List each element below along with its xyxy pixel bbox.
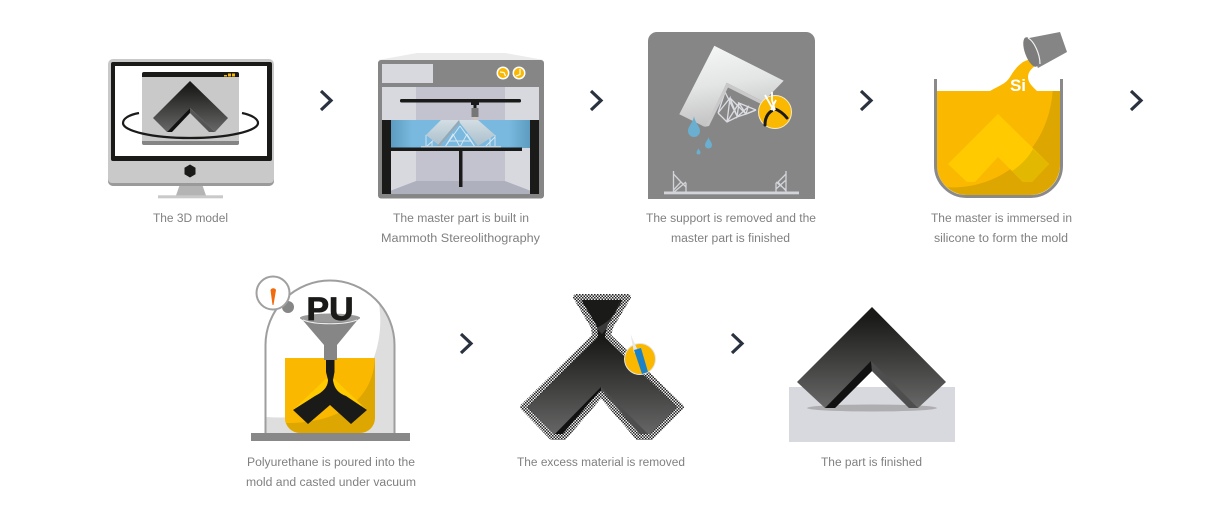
knife badge <box>624 334 656 374</box>
caption: The master part is built in <box>393 213 529 225</box>
icon: stereolithography machine <box>378 53 544 198</box>
arrow 5 <box>461 334 471 353</box>
caption: Polyurethane is poured into the <box>247 457 415 469</box>
control knobs <box>496 66 526 80</box>
step 5: polyurethane casting <box>246 276 416 489</box>
dome <box>266 280 400 440</box>
caption <box>931 213 1072 245</box>
funnel <box>300 314 360 360</box>
caption: The master is immersed in <box>931 213 1072 225</box>
caption: silicone to form the mold <box>934 233 1068 245</box>
caption: The excess material is removed <box>517 457 685 469</box>
resin drops <box>688 116 712 154</box>
casting in black <box>293 360 367 424</box>
arrow 1 <box>321 91 331 110</box>
arrow 4 <box>1131 91 1141 110</box>
process infographic <box>108 32 1144 486</box>
step 2: master part built <box>378 53 544 245</box>
lattice supports <box>718 92 756 122</box>
caption <box>246 457 416 489</box>
caption: master part is finished <box>671 233 790 245</box>
icon: part with excess flash <box>523 297 681 437</box>
3D part on screen <box>153 81 228 132</box>
icon: finished part on surface <box>789 307 955 442</box>
arrow 2 <box>591 91 601 110</box>
step 6: excess removal <box>517 297 685 469</box>
label Si: Si <box>1010 76 1026 95</box>
master part <box>679 46 784 127</box>
icon: vacuum chamber <box>251 276 410 441</box>
build plate with remnants <box>664 171 799 194</box>
caption: The part is finished <box>821 457 922 469</box>
step 3: support removed <box>646 32 816 245</box>
rotation orbit <box>123 113 258 138</box>
step 7: finished part <box>789 307 955 469</box>
caption: The 3D model <box>153 213 228 225</box>
caption: The support is removed and the <box>646 213 816 225</box>
label PU: PU <box>306 291 354 327</box>
icon: silicone container <box>930 32 1067 196</box>
mold <box>285 358 375 433</box>
cup <box>1020 32 1067 69</box>
arrow 3 <box>861 91 871 110</box>
caption: Mammoth Stereolithography <box>381 233 540 245</box>
step 4: silicone mold <box>930 32 1072 245</box>
caption <box>381 213 540 245</box>
submerged part <box>948 114 1049 182</box>
step 1: the 3D model <box>108 59 274 225</box>
caption <box>646 213 816 245</box>
silicone pour <box>990 58 1040 91</box>
part in resin <box>421 120 501 148</box>
icon: computer monitor <box>108 59 274 198</box>
pliers badge <box>758 92 792 128</box>
base <box>251 433 410 441</box>
icon: finishing panel <box>648 32 815 199</box>
vacuum gauge <box>256 276 294 313</box>
caption: mold and casted under vacuum <box>246 477 416 489</box>
arrow 6 <box>732 334 742 353</box>
